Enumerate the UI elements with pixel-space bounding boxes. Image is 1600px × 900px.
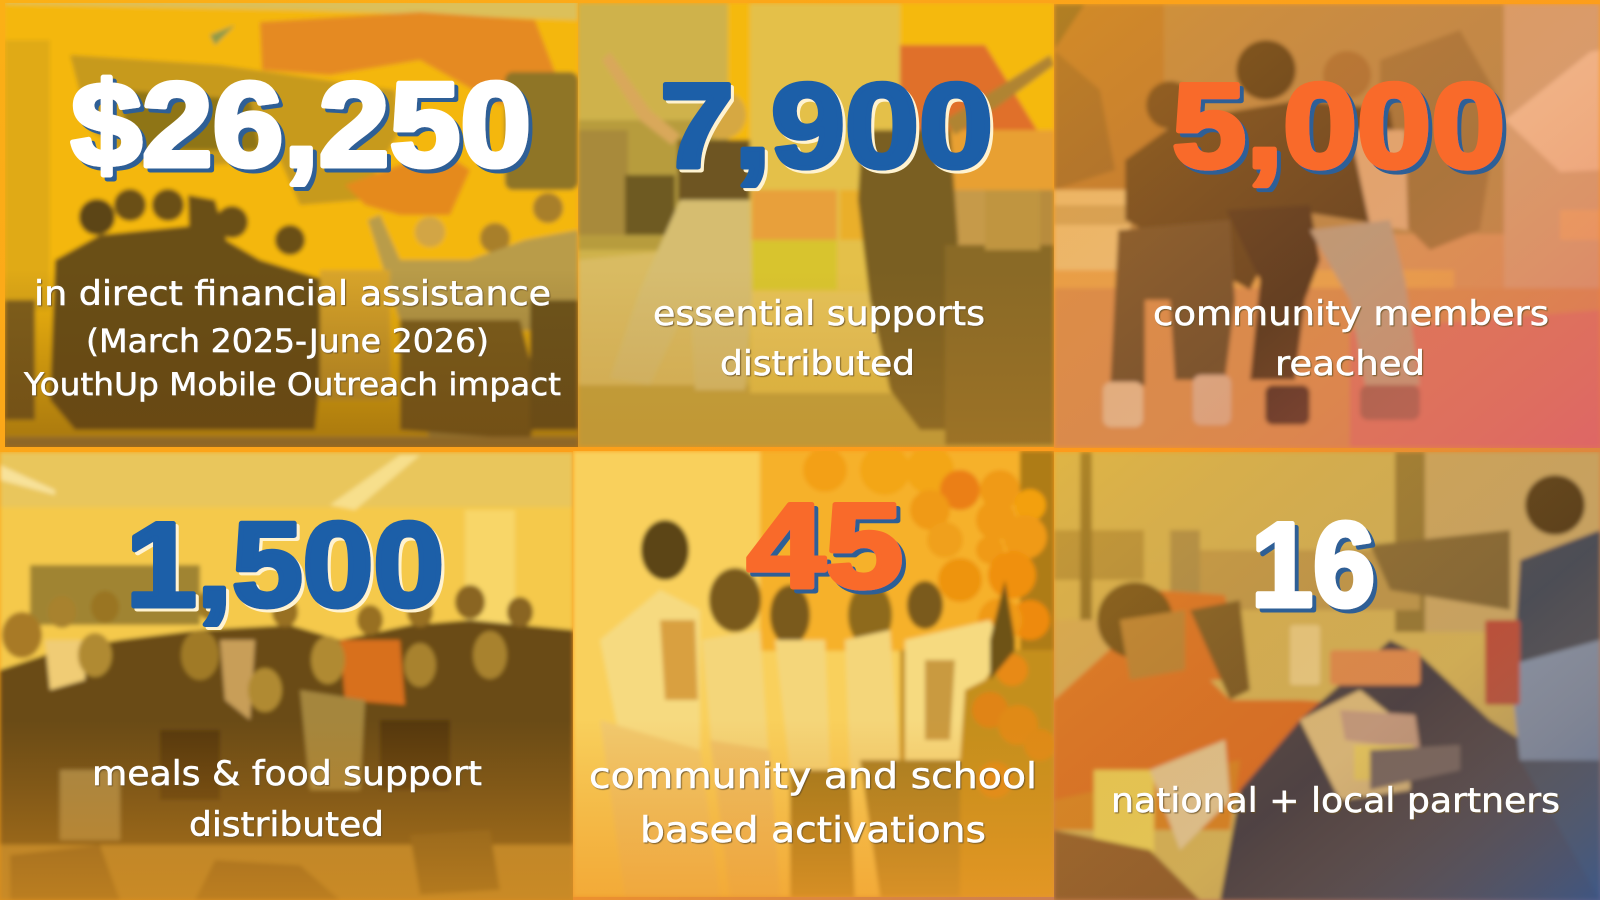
caption: community members reached: community members xyxy=(1153,294,1549,334)
caption: direct financial assistance: in direct financial assistance xyxy=(34,274,551,314)
photo: three young people seated before a mural xyxy=(1054,4,1600,448)
caption: essential supports distributed: distributed xyxy=(720,344,915,384)
caption: essential supports distributed: essential supports xyxy=(653,294,985,334)
photo: kids playing card games outdoors xyxy=(1054,452,1600,900)
photo: youth in matching shirts beside orange balloons xyxy=(573,445,1056,897)
panel: meals and food support xyxy=(0,452,573,900)
caption: direct financial assistance: YouthUp Mobile Outreach impact xyxy=(23,367,561,403)
panel: financial assistance xyxy=(5,0,578,447)
number: 45: 45 xyxy=(747,479,903,613)
photo: outreach staff by the Every Youth banner xyxy=(578,3,1054,447)
number: $26,250: $26,250 xyxy=(71,58,531,192)
panel: community and school activations xyxy=(573,445,1056,897)
caption: direct financial assistance xyxy=(23,274,561,403)
caption: national and local partners: national + local partners xyxy=(1111,781,1560,821)
panel: national and local partners xyxy=(1054,452,1600,900)
caption: essential supports distributed xyxy=(653,294,985,384)
caption: meals and food support distributed xyxy=(92,754,482,845)
caption: meals and food support distributed: meals & food support xyxy=(92,754,482,794)
number: 1,500: 1,500 xyxy=(126,498,444,632)
panel: essential supports xyxy=(578,3,1054,447)
caption: direct financial assistance: (March 2025-June 2026) xyxy=(86,322,489,360)
number: 5,000: 5,000 xyxy=(1172,59,1505,193)
caption: community and school based activations: based activations xyxy=(640,810,986,851)
caption: meals and food support distributed: distributed xyxy=(189,805,384,845)
photo: large youth group indoors xyxy=(0,452,573,900)
number: 7,900: 7,900 xyxy=(660,59,993,193)
caption: community and school based activations: community and school xyxy=(589,756,1037,797)
caption: community members reached: reached xyxy=(1275,344,1425,384)
caption: community members reached xyxy=(1153,294,1549,384)
number: 16: 16 xyxy=(1251,498,1375,632)
panel: community members xyxy=(1054,4,1600,448)
photo: team in front of YouthUp mobile center xyxy=(5,0,578,447)
caption: community and school based activations xyxy=(589,756,1037,851)
